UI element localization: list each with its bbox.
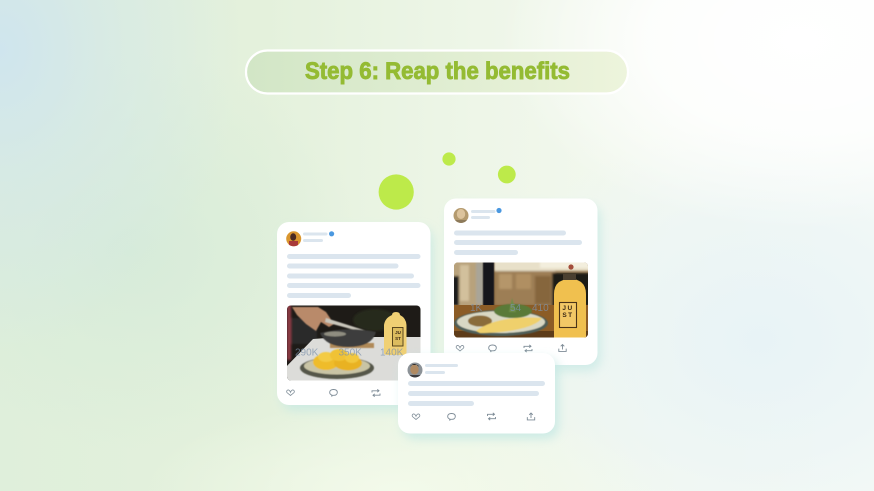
photo: scrambled eggs and JUST bottle: ST [395,336,401,341]
name lines [425,364,458,374]
faded metric numbers: 140K [380,348,404,358]
faded metric numbers [296,348,403,356]
bottle label text: JU [562,305,574,312]
photo: omelette and JUST bottle [454,262,588,338]
action icons [456,344,566,352]
avatar: bald man [454,208,468,223]
infographic canvas [245,49,627,442]
post text lines [408,381,545,406]
faded metric numbers: 54 [510,303,522,314]
title text: Step 6: Reap the benefits [305,58,570,85]
verified name lines [303,231,334,242]
faded metric numbers: 350K [338,348,362,358]
verified name lines [471,208,502,219]
post text lines [454,230,582,255]
post card 3: bottom centre [398,353,559,439]
decorative green circles [379,152,516,210]
faded metric numbers [470,304,548,311]
avatar: man [408,362,422,378]
post card 1: left [277,222,434,411]
faded metric numbers: 290K [295,348,319,358]
title pill [246,50,628,94]
photo: omelette and JUST bottle: ST [562,312,574,319]
post text lines [287,254,420,298]
faded metric numbers: 410 [532,303,549,314]
action icons [287,389,380,397]
avatar: woman [286,231,302,247]
post card 2: top right [444,198,601,371]
bottle label text: JU [395,330,401,335]
photo: scrambled eggs and JUST bottle [285,305,421,381]
action icons [412,413,535,420]
faded metric numbers: 1K [470,303,483,314]
